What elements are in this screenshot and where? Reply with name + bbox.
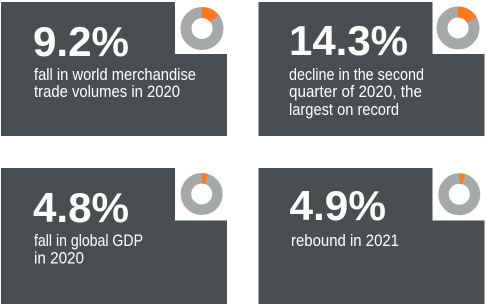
icon: donut chart 9.2%: [186, 7, 219, 44]
description: global GDP: [34, 232, 143, 268]
description: second quarter: [289, 66, 424, 119]
description: rebound: rebound in 2021: [291, 232, 399, 250]
icon: donut chart 4.9%: [444, 173, 475, 210]
panel: 2021 rebound: [258, 168, 484, 304]
panel: world merchandise trade: [1, 2, 227, 136]
description: trade volumes: fall in world merchandise: [34, 66, 196, 84]
panel: global GDP: [1, 168, 227, 304]
panel: second quarter decline: [258, 2, 484, 136]
statistic: 4.9%: 4.9%: [290, 182, 386, 229]
icon: donut chart 14.3%: [442, 6, 477, 44]
description: second quarter: quarter of 2020, the: [289, 83, 422, 101]
description: trade volumes: trade volumes in 2020: [34, 83, 180, 101]
description: global GDP: in 2020: [34, 250, 84, 268]
description: second quarter: decline in the second: [289, 66, 424, 84]
description: global GDP: fall in global GDP: [34, 232, 143, 250]
icon: donut chart 4.8%: [186, 173, 217, 210]
description: second quarter: largest on record: [289, 101, 399, 119]
statistic: 9.2%: 9.2%: [33, 18, 129, 65]
statistic: 14.3%: 14.3%: [289, 17, 408, 64]
statistic: 4.8%: 4.8%: [33, 184, 129, 231]
description: trade volumes: [34, 66, 196, 101]
